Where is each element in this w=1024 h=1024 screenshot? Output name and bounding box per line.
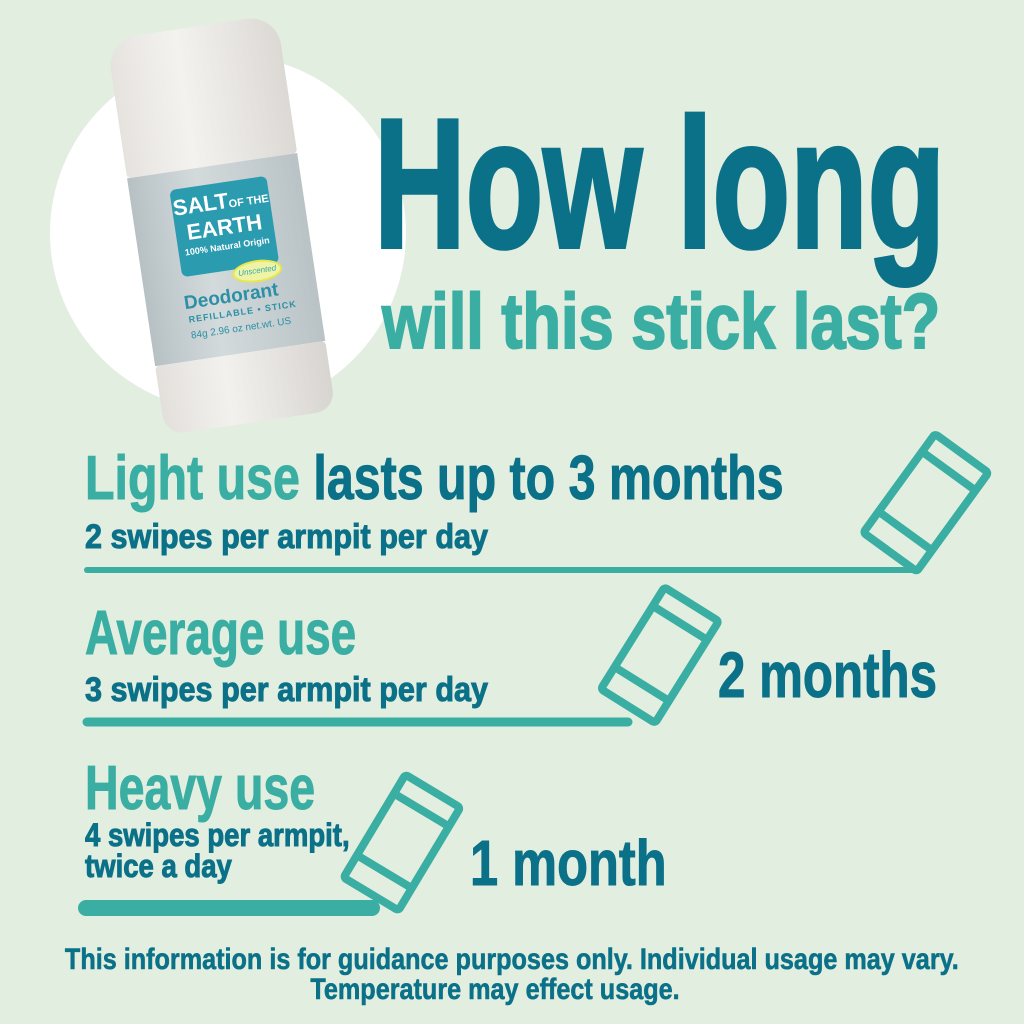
line: average <box>87 718 628 726</box>
line: heavy <box>86 900 372 916</box>
line: light <box>87 567 912 573</box>
light use heading: Light use lasts up to 3 months <box>85 444 784 513</box>
average use heading: Average use <box>85 599 356 668</box>
product: deodorant stick: SALTOF THE <box>171 188 270 221</box>
average result: 2 months <box>718 639 937 711</box>
product: deodorant stick: 100% Natural Origin <box>184 235 270 258</box>
product: deodorant stick: 84g 2.96 oz net.wt. US <box>190 316 292 342</box>
footer disclaimer: Temperature may effect usage. <box>310 973 680 1006</box>
footer disclaimer: This information is for guidance purposes only. Individual usage may vary. <box>65 943 959 976</box>
heavy use detail <box>84 817 350 884</box>
footer disclaimer <box>64 943 959 1006</box>
icon: stick heavy <box>344 775 460 910</box>
heavy use detail: 4 swipes per armpit, <box>85 817 350 853</box>
icon: stick light <box>863 434 988 571</box>
average use detail: 3 swipes per armpit per day <box>85 671 488 709</box>
product: deodorant stick <box>110 18 333 432</box>
heavy result: 1 month <box>470 827 667 899</box>
heavy use heading: Heavy use <box>85 754 315 823</box>
title: How long <box>374 80 945 286</box>
light use detail: 2 swipes per armpit per day <box>85 518 488 556</box>
product: deodorant stick: REFILLABLE • STICK <box>188 299 297 325</box>
icon: stick average <box>601 587 719 723</box>
circle backdrop <box>50 55 406 411</box>
product: deodorant stick: Unscented <box>238 263 277 278</box>
product: deodorant stick: Deodorant <box>183 279 280 314</box>
heavy use detail: twice a day <box>85 848 232 884</box>
product: deodorant stick: EARTH <box>185 209 264 245</box>
subtitle: will this stick last? <box>382 277 940 365</box>
